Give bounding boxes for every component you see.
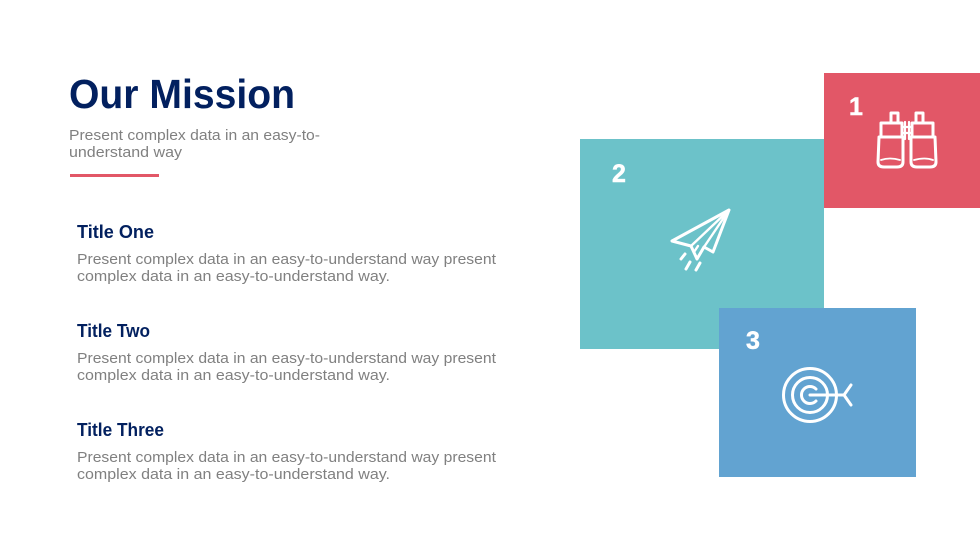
accent underline — [70, 174, 159, 177]
subtitle: understand way — [69, 144, 183, 161]
panel: teal card 2 — [580, 139, 824, 349]
panel: blue card 3 — [719, 308, 916, 477]
panel: red card 1 — [824, 73, 980, 208]
text block: title two — [77, 321, 497, 384]
text block: title three — [77, 420, 497, 483]
text block: title one: Title One — [77, 222, 154, 242]
text block: title two: Present complex data in an easy-to-understand way present — [77, 350, 497, 367]
text block: title one — [77, 222, 497, 285]
text block: title one: Present complex data in an easy-to-understand way present — [77, 251, 497, 268]
subtitle — [69, 127, 320, 161]
icon: binoculars — [878, 113, 936, 167]
icon: target with arrow — [784, 368, 851, 422]
subtitle: Present complex data in an easy-to- — [69, 127, 320, 144]
icon: paper plane — [672, 210, 729, 270]
text block: title two: complex data in an easy-to-understand way. — [77, 367, 390, 384]
text block: title three: Title Three — [77, 420, 164, 440]
text block: title one: complex data in an easy-to-understand way. — [77, 268, 390, 285]
panel: teal card 2: 2 — [612, 160, 626, 188]
panel: red card 1: 1 — [849, 93, 863, 121]
text block: title three: Present complex data in an easy-to-understand way present — [77, 449, 497, 466]
text block: title two: Title Two — [77, 321, 150, 341]
title: Our Mission — [69, 71, 295, 117]
text block: title three: complex data in an easy-to-understand way. — [77, 466, 390, 483]
panel: blue card 3: 3 — [746, 327, 760, 355]
